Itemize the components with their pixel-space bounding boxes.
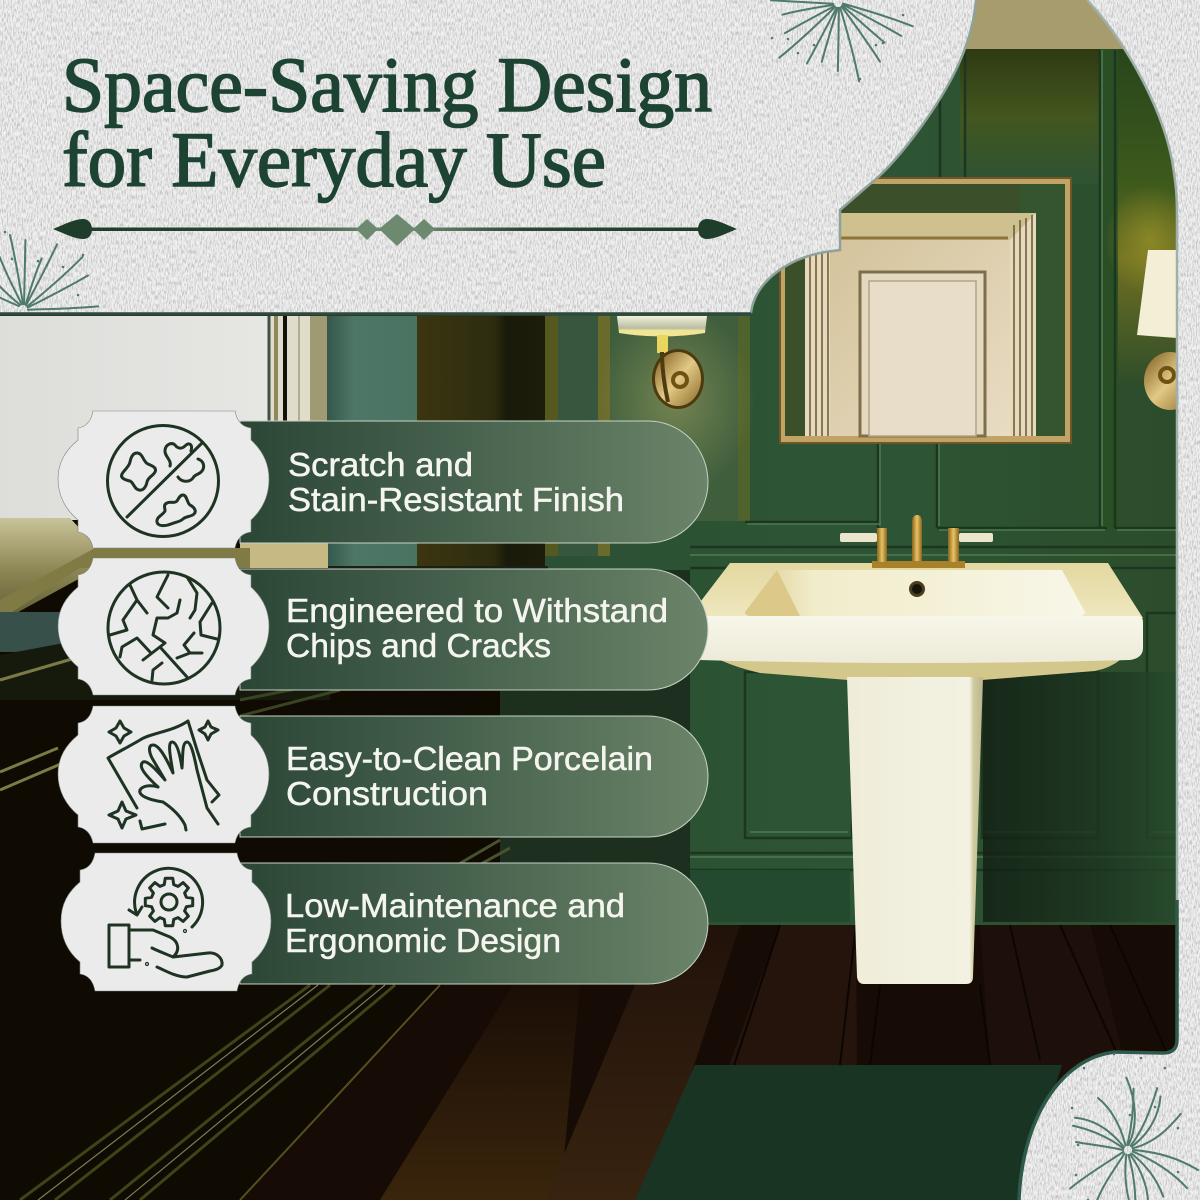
green panelled wall [327,0,1200,925]
title [62,41,712,203]
text 1: Stain-Resistant Finish [288,481,624,518]
icon: no stains [108,426,218,536]
icon: cracked surface [108,572,220,684]
pill 4 [240,863,708,984]
text 2 [286,592,668,664]
title: Space-Saving Design [62,41,712,128]
text 3: Construction [286,775,488,812]
wooden floor [20,925,1177,1200]
feature 3: easy to clean [58,706,708,843]
text 4 [285,887,625,959]
window and sill on the left [0,316,548,875]
text 3: Easy-to-Clean Porcelain [286,740,653,777]
badge 3 [58,706,269,843]
icon: gear over open hand [109,868,222,977]
text 1: Scratch and [288,446,473,483]
badge 1 [58,411,269,548]
right wall sconce [1137,250,1196,410]
feature 1: scratch and stain-resistant [58,411,708,548]
icon: hand wiping with cloth [108,721,219,830]
ornament: top sunburst [771,0,914,81]
ornament: left sunburst [0,231,98,319]
pill 2 [240,569,708,690]
shadow right of pedestal [983,672,1177,922]
brass faucet [840,515,993,568]
left wall sconce [617,316,707,409]
pedestal sink [688,515,1143,984]
text 4: Ergonomic Design [285,922,561,959]
text 1 [288,446,624,518]
feature 2: chip and crack resistant [58,558,708,695]
mirror [779,177,1072,444]
text 3 [286,740,653,812]
feature 4: low maintenance [61,853,708,991]
text 2: Engineered to Withstand [286,592,668,629]
pill 3 [240,716,708,837]
feature list [58,411,708,991]
green rug [635,1065,1062,1200]
badge 2 [58,558,269,695]
badge 4 [61,853,271,991]
ornament: bottom-right sunburst [1065,1053,1198,1200]
text 2: Chips and Cracks [286,627,551,664]
title divider ornament [53,214,737,246]
title: for Everyday Use [62,116,606,203]
pill 1 [240,421,708,543]
text 4: Low-Maintenance and [285,887,625,924]
